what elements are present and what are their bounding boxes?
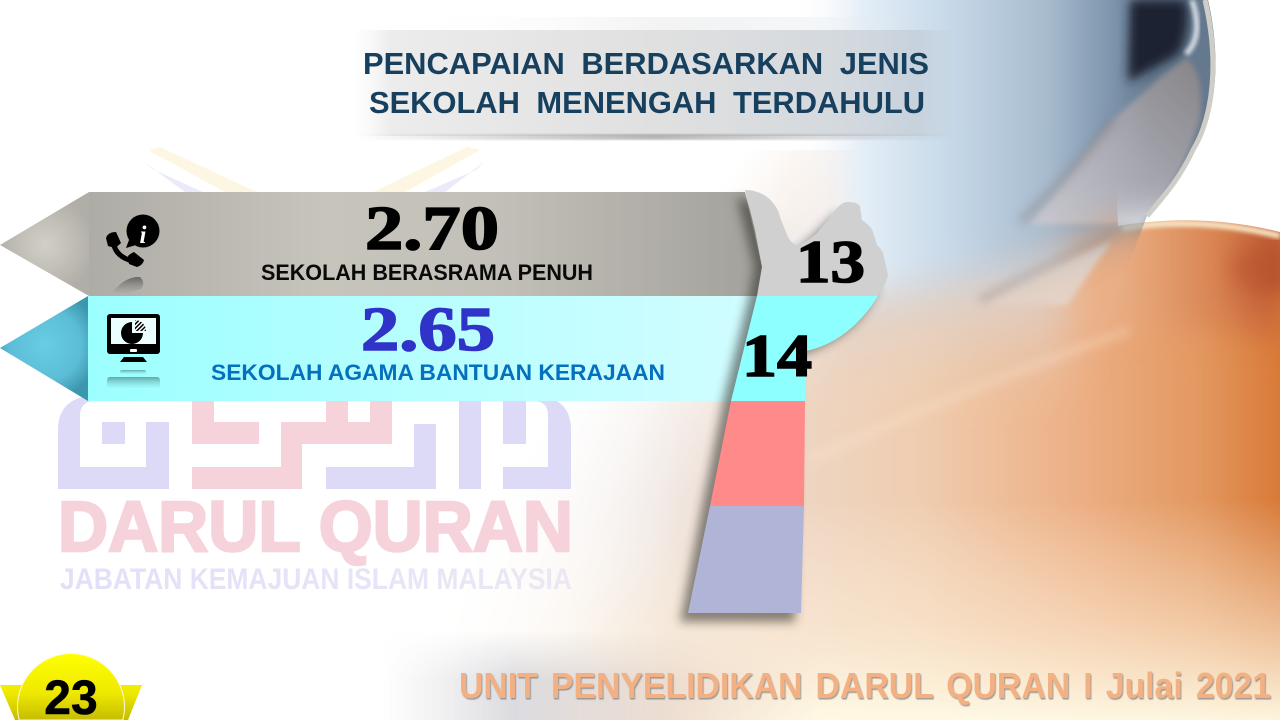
logo: agency name: JABATAN KEMAJUAN ISLAM MALAYSIA	[60, 563, 572, 596]
infographic thumb: four coloured segments	[688, 190, 888, 613]
panel: cyan bar, Sekolah Agama Bantuan Kerajaan	[0, 296, 757, 401]
count: 14: 14	[742, 323, 812, 389]
title text	[363, 46, 929, 120]
segment: red	[710, 401, 805, 506]
logo: kufic calligraphy	[58, 395, 571, 489]
panel: title banner	[355, 17, 960, 139]
title text: PENCAPAIAN BERDASARKAN JENIS	[363, 46, 929, 81]
logo: DARUL QURAN wordmark: DARUL QURAN	[58, 488, 573, 567]
title text: SEKOLAH MENENGAH TERDAHULU	[369, 85, 925, 120]
arrow tip: grey	[0, 192, 89, 296]
watermark logo: Darul Quran	[58, 147, 573, 596]
icon reflection: phone	[112, 277, 143, 293]
value: 2.70: 2.70	[365, 195, 499, 263]
background: abstract white, blue and orange artwork	[414, 0, 1280, 720]
segment: lavender	[688, 506, 804, 613]
label: Sekolah Agama Bantuan Kerajaan: SEKOLAH AGAMA BANTUAN KERAJAAN	[211, 360, 665, 385]
count: 13: 13	[796, 229, 865, 295]
logo: book chevrons	[144, 147, 484, 192]
segment: cyan	[731, 296, 878, 401]
panel: grey bar, Sekolah Berasrama Penuh	[0, 192, 762, 296]
icon: phone with info bubble	[106, 214, 160, 267]
arrow tip: blue	[0, 296, 88, 401]
value: 2.65: 2.65	[361, 296, 495, 364]
label: Sekolah Berasrama Penuh: SEKOLAH BERASRAMA PENUH	[261, 260, 593, 285]
thumb shadow	[680, 198, 878, 622]
segment: grey thumb	[745, 190, 888, 296]
icon: phone with info bubble: i	[140, 222, 147, 249]
icon reflection: monitor	[107, 370, 160, 388]
page number badge	[0, 654, 142, 720]
icon: monitor with pie chart	[107, 314, 160, 362]
